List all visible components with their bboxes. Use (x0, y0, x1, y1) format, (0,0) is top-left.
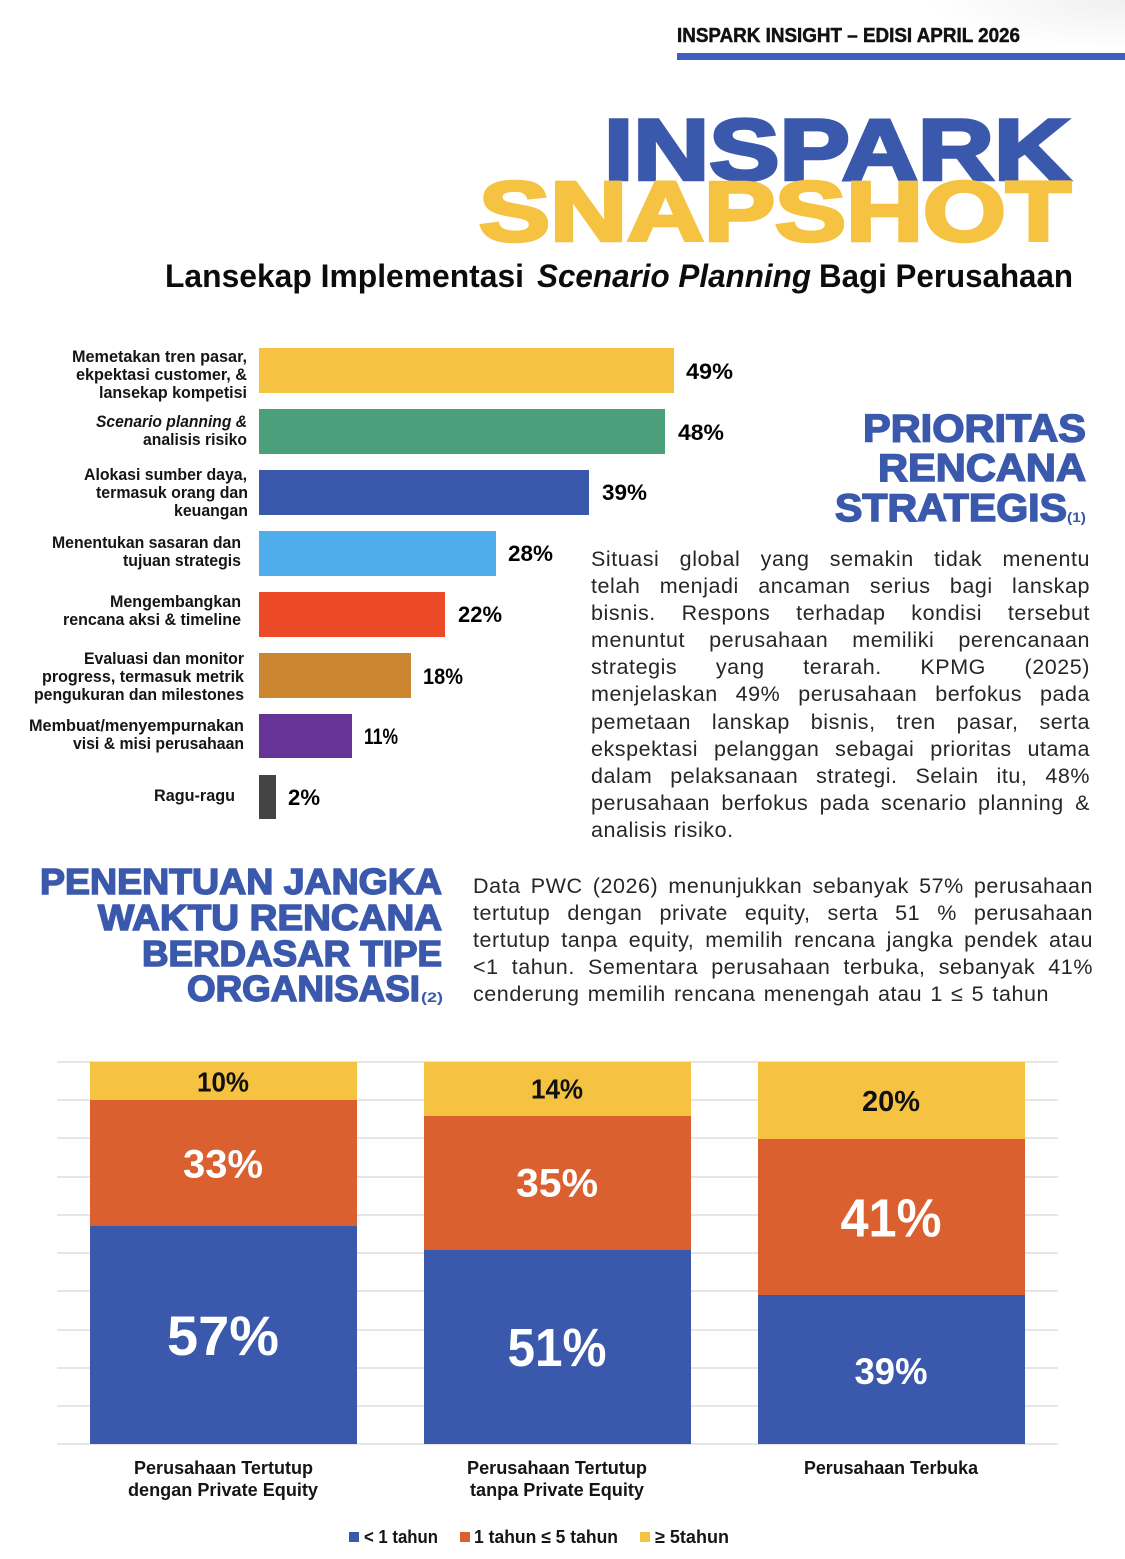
bar row: resource allocation 39% (84, 466, 647, 520)
bar row: market mapping 49% (72, 348, 733, 402)
column: closed companies without private equity: tanpa Private Equity (470, 1480, 644, 1500)
text block: strategic priorities paragraph: bisnis. Respons terhadap kondisi tersebut (591, 601, 1090, 625)
title (479, 102, 1071, 258)
text block: strategic priorities paragraph: perusahaan berfokus pada scenario planning & (591, 791, 1090, 815)
title: SNAPSHOT (479, 164, 1071, 258)
header: edition label: INSPARK INSIGHT – EDISI APRIL 2026 (677, 25, 1020, 47)
column: public companies: 39% (854, 1351, 928, 1392)
bar row: vision and mission 11% (29, 714, 398, 758)
column: closed companies without private equity: 14% (531, 1074, 583, 1104)
bar chart: strategic plan priorities (29, 348, 733, 819)
subtitle: Lansekap Implementasi (165, 258, 524, 294)
bar row: evaluation 18%: 18% (423, 664, 463, 689)
heading: planning horizon by organisation type: ORGANISASI (187, 968, 420, 1009)
header: edition label (677, 25, 1125, 60)
title: INSPARK (604, 102, 1070, 198)
column: closed companies with private equity: 10% (197, 1066, 249, 1098)
bar row: scenario planning 48%: Scenario planning & (96, 413, 247, 431)
bar row: market mapping 49%: lansekap kompetisi (99, 384, 247, 402)
heading: strategic plan priorities: STRATEGIS (835, 487, 1067, 530)
column: closed companies with private equity: 57% (167, 1304, 279, 1367)
text block: strategic priorities paragraph: ekspektasi pelanggan sebagai prioritas utama (591, 737, 1090, 761)
bar row: undecided 2%: Ragu-ragu (154, 787, 235, 805)
bar row: action plan 22% (63, 592, 502, 637)
legend: 1 tahun ≤ 5 tahun (474, 1527, 618, 1547)
bar row: market mapping 49%: ekpektasi customer, & (76, 366, 247, 384)
column: closed companies with private equity (90, 1062, 357, 1500)
heading: strategic plan priorities: RENCANA (878, 447, 1086, 490)
column: public companies: Perusahaan Terbuka (804, 1458, 979, 1478)
legend: < 1 tahun (364, 1527, 438, 1547)
legend: ≥ 5tahun (655, 1527, 729, 1547)
stacked bar chart: plan horizon (57, 1062, 1058, 1500)
column: closed companies without private equity (424, 1062, 691, 1500)
bar row: goals 28% (52, 531, 553, 576)
bar row: evaluation 18%: pengukuran dan milestones (34, 686, 244, 704)
text block: strategic priorities paragraph: telah menjadi ancaman serius bagi lanskap (591, 574, 1090, 598)
bar row: action plan 22%: rencana aksi & timeline (63, 611, 241, 629)
heading: planning horizon by organisation type: (2) (421, 989, 443, 1005)
text block: PWC data paragraph: tertutup tanpa equity, memilih rencana jangka pendek atau (473, 928, 1093, 952)
column: public companies: 20% (862, 1086, 920, 1118)
bar row: evaluation 18%: progress, termasuk metrik (42, 668, 245, 686)
column: public companies: 41% (840, 1188, 942, 1248)
subtitle: Scenario Planning (537, 258, 811, 294)
text block: PWC data paragraph: cenderung memilih rencana menengah atau 1 ≤ 5 tahun (473, 982, 1049, 1006)
column: closed companies without private equity: 35% (516, 1162, 598, 1206)
legend (349, 1527, 729, 1547)
bar row: resource allocation 39%: 39% (602, 480, 647, 505)
bar row: evaluation 18%: Evaluasi dan monitor (84, 650, 245, 668)
bar row: vision and mission 11%: Membuat/menyempurnakan (29, 717, 244, 735)
text block: strategic priorities paragraph: pemetaan lanskap bisnis, tren pasar, serta (591, 710, 1090, 734)
column: closed companies with private equity: dengan Private Equity (128, 1480, 318, 1500)
column: public companies (758, 1062, 1025, 1478)
bar row: resource allocation 39%: termasuk orang dan (96, 484, 248, 502)
bar row: market mapping 49%: 49% (686, 359, 733, 384)
subtitle: Bagi Perusahaan (819, 258, 1073, 294)
heading: strategic plan priorities (835, 408, 1086, 530)
bar row: goals 28%: tujuan strategis (123, 552, 241, 570)
column: closed companies without private equity: 51% (508, 1318, 606, 1378)
bar row: vision and mission 11%: 11% (364, 724, 398, 749)
column: closed companies with private equity: 33% (183, 1142, 263, 1186)
text block: strategic priorities paragraph: dalam pelaksanaan strategi. Selain itu, 48% (591, 764, 1090, 788)
text block: strategic priorities paragraph: Situasi global yang semakin tidak menentu (591, 546, 1090, 570)
text block: strategic priorities paragraph: analisis risiko. (591, 818, 734, 842)
bar row: undecided 2%: 2% (288, 785, 320, 810)
bar row: evaluation 18% (34, 650, 463, 704)
text block: strategic priorities paragraph: strategis yang terarah. KPMG (2025) (591, 655, 1090, 679)
heading: strategic plan priorities: (1) (1067, 509, 1086, 525)
text block: PWC data paragraph: <1 tahun. Sementara perusahaan terbuka, sebanyak 41% (473, 955, 1093, 979)
bar row: scenario planning 48%: analisis risiko (143, 431, 247, 449)
bar row: scenario planning 48%: 48% (678, 420, 724, 445)
column: closed companies with private equity: Perusahaan Tertutup (134, 1458, 313, 1478)
bar row: goals 28%: 28% (508, 541, 553, 566)
heading: planning horizon by organisation type: BERDASAR TIPE (142, 933, 442, 974)
bar row: market mapping 49%: Memetakan tren pasar, (72, 348, 247, 366)
bar row: scenario planning 48% (96, 409, 724, 454)
subtitle (165, 258, 1073, 294)
text block: strategic priorities paragraph: menjelaskan 49% perusahaan berfokus pada (591, 682, 1090, 706)
bar row: action plan 22%: Mengembangkan (110, 593, 241, 611)
bar row: goals 28%: Menentukan sasaran dan (52, 534, 241, 552)
bar row: undecided 2% (154, 775, 320, 819)
heading: planning horizon by organisation type: WAKTU RENCANA (98, 897, 442, 938)
text block: PWC data paragraph: Data PWC (2026) menunjukkan sebanyak 57% perusahaan (473, 874, 1093, 898)
bar row: resource allocation 39%: Alokasi sumber daya, (84, 466, 247, 484)
column: closed companies without private equity: Perusahaan Tertutup (467, 1458, 647, 1478)
heading: strategic plan priorities: PRIORITAS (863, 408, 1086, 450)
bar row: vision and mission 11%: visi & misi perusahaan (73, 735, 244, 753)
text block: strategic priorities paragraph (591, 546, 1090, 842)
heading: planning horizon by organisation type: PENENTUAN JANGKA (40, 861, 442, 902)
text block: PWC data paragraph (473, 874, 1093, 1006)
bar row: resource allocation 39%: keuangan (174, 502, 248, 520)
bar row: action plan 22%: 22% (458, 602, 502, 627)
text block: strategic priorities paragraph: menuntut perusahaan memiliki perencanaan (591, 628, 1090, 652)
text block: PWC data paragraph: tertutup dengan private equity, serta 51 % perusahaan (473, 901, 1093, 925)
heading: planning horizon by organisation type (40, 861, 443, 1009)
